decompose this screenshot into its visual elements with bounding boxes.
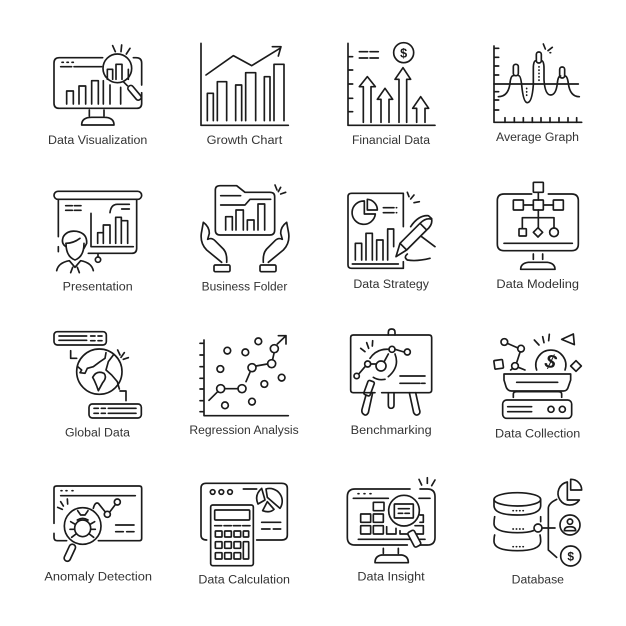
panel: Business Folder [201, 185, 289, 293]
panel: Data Insight [347, 478, 435, 584]
icon: monitor with magnifier [54, 45, 142, 125]
label: Regression Analysis [189, 423, 299, 437]
panel: Data Collection [494, 334, 581, 440]
label: Data Modeling [496, 277, 579, 291]
icon: monitor with flowchart [497, 182, 578, 269]
icon: window with bug under magnifier [54, 486, 142, 562]
panel: Anomaly Detection [44, 486, 152, 584]
label: Data Visualization [48, 133, 147, 147]
icon: scatter plot [200, 336, 288, 416]
label: Data Strategy [353, 277, 430, 291]
label: Presentation [63, 279, 133, 293]
panel: Database [494, 479, 582, 586]
label: Data Calculation [198, 572, 290, 586]
icon: bar chart with trend arrow [201, 43, 288, 125]
panel: Financial Data [348, 43, 435, 147]
icon: tray, server and coin: $ [542, 351, 559, 374]
panel: Data Visualization [48, 45, 147, 147]
icon: wave graph [494, 44, 582, 122]
panel: Average Graph [494, 44, 582, 144]
panel: Benchmarking [351, 329, 432, 437]
icon: report with pen [348, 192, 435, 268]
icon: easel with chart [351, 329, 432, 415]
label: Average Graph [496, 130, 579, 144]
icon: calculator and card [201, 483, 287, 566]
panel: Regression Analysis [189, 336, 299, 437]
label: Global Data [65, 426, 130, 440]
label: Financial Data [352, 133, 430, 147]
panel: Data Calculation [198, 483, 290, 586]
label: Database [512, 572, 564, 586]
label: Data Insight [357, 570, 425, 584]
icon: folder held by hands [201, 185, 289, 272]
label: Anomaly Detection [44, 570, 152, 584]
icon: globe with data tags [54, 332, 141, 418]
label: Data Collection [495, 426, 580, 440]
icon: database and outputs: $ [567, 549, 574, 563]
panel: Data Strategy [348, 192, 435, 291]
panel: Presentation [54, 191, 142, 293]
panel: Data Modeling [496, 182, 579, 291]
label: Benchmarking [351, 423, 432, 437]
icon: presenter and board [54, 191, 142, 273]
panel: Global Data [54, 332, 141, 440]
label: Growth Chart [207, 133, 283, 147]
panel: Growth Chart [201, 43, 288, 147]
label: Business Folder [202, 279, 287, 293]
icon: arrows and coin: $ [400, 46, 407, 60]
icon: monitor with magnifier [347, 478, 435, 563]
